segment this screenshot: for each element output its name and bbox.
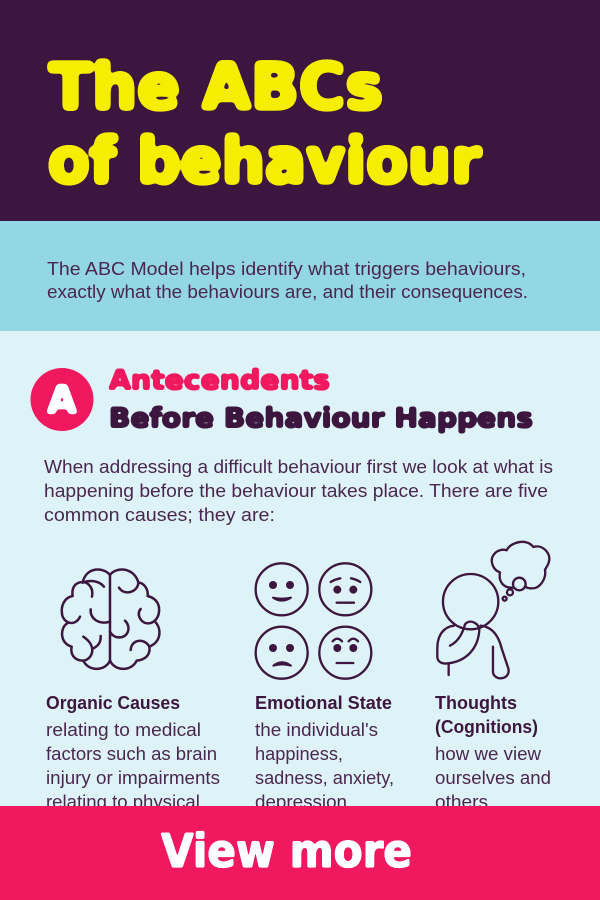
column: organic causes: injury or impairments (46, 768, 220, 788)
icon: happy face (256, 563, 308, 615)
column: organic causes: relating to physical, (46, 792, 205, 812)
column: organic causes: Organic Causes (46, 693, 180, 713)
panel: introduction band (0, 221, 600, 331)
column: emotional state (255, 693, 394, 812)
panel: view more banner (0, 806, 600, 900)
intro text: exactly what the behaviours are, and their consequences. (47, 282, 528, 302)
column: emotional state: the individual's (255, 720, 378, 740)
column: emotional state: Emotional State (255, 693, 392, 713)
icon: person thinking (437, 542, 549, 678)
title (48, 50, 481, 198)
title: of behaviour (48, 124, 481, 198)
column: emotional state: happiness, (255, 744, 343, 764)
column: organic causes (46, 693, 220, 812)
intro text (47, 259, 528, 302)
icon: brain (62, 570, 159, 669)
icon: four faces (256, 563, 371, 679)
icon: letter A badge (30, 368, 94, 431)
section description (44, 457, 553, 525)
column: organic causes: relating to medical (46, 720, 201, 740)
icon: sad face (256, 627, 308, 679)
section description: common causes; they are: (44, 505, 275, 525)
column: thoughts: ourselves and (435, 768, 551, 788)
section description: When addressing a difficult behaviour first we look at what is (44, 457, 553, 477)
panel: title band (0, 0, 600, 221)
column: organic causes: factors such as brain (46, 744, 217, 764)
column: thoughts (435, 693, 551, 812)
column: thoughts: (Cognitions) (435, 717, 538, 737)
icon: anxious face (319, 563, 371, 615)
panel: antecedents section (0, 331, 600, 812)
column: thoughts: others (435, 792, 488, 812)
title: The ABCs (49, 50, 383, 124)
icon: surprised face (319, 627, 371, 679)
column: emotional state: depression (255, 792, 347, 812)
column: thoughts: how we view (435, 744, 542, 764)
column: thoughts: Thoughts (435, 693, 517, 713)
column: emotional state: sadness, anxiety, (255, 768, 394, 788)
intro text: The ABC Model helps identify what triggers behaviours, (47, 259, 526, 279)
heading: antecedents: Antecendents (109, 365, 330, 396)
button label: View more (161, 824, 412, 878)
icon: thought bubble (492, 542, 549, 601)
section description: happening before the behaviour takes place. There are five (44, 481, 548, 501)
icon: letter A badge: A (47, 378, 77, 422)
heading: before behaviour happens: Before Behaviour Happens (109, 403, 533, 434)
